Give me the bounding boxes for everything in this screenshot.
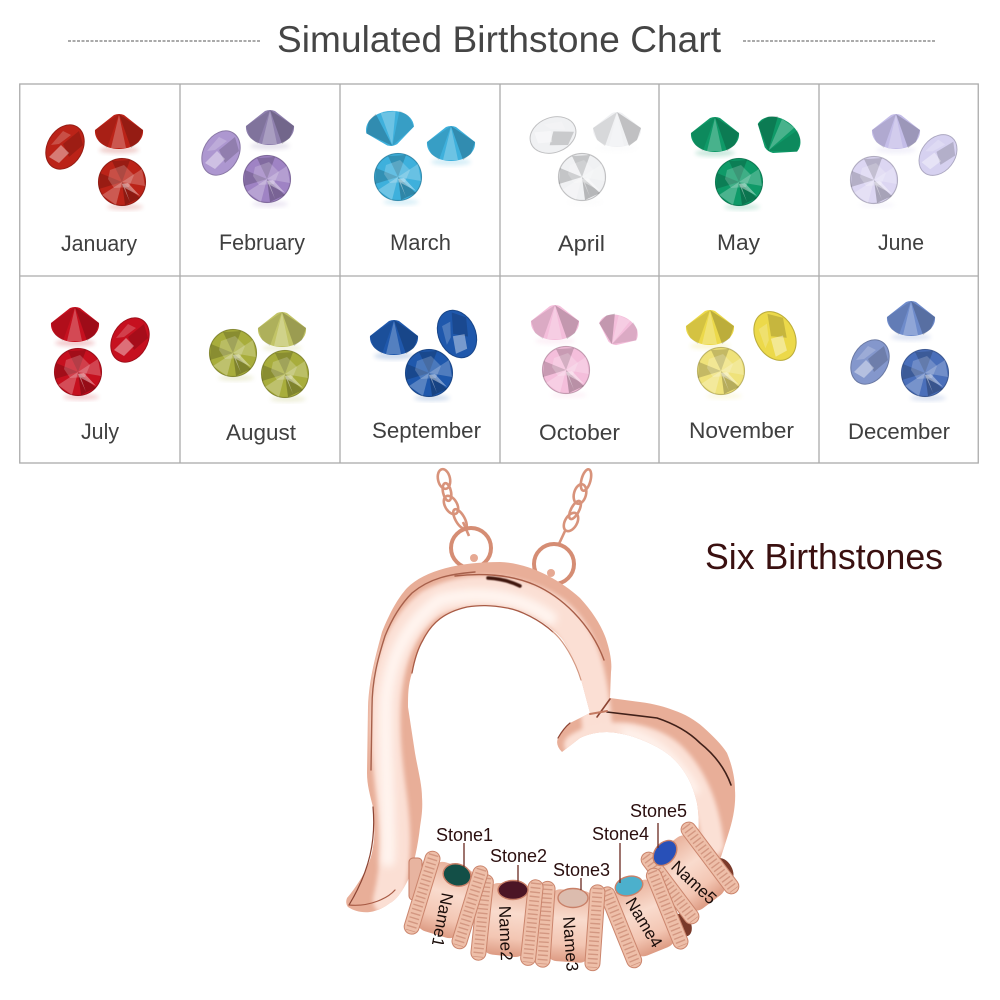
bead 2 — [470, 874, 544, 966]
heart pendant — [340, 555, 740, 920]
gems: February — [193, 110, 294, 207]
stone labels: Stone2 — [490, 846, 547, 866]
bead names: Name5 — [667, 857, 720, 908]
title: Simulated Birthstone Chart — [277, 19, 722, 60]
cell: November — [686, 293, 819, 443]
chain right — [558, 468, 593, 546]
label: April: April — [558, 231, 605, 256]
stone labels: Stone4 — [592, 824, 649, 844]
stone labels: Stone5 — [630, 801, 687, 821]
bead names — [428, 857, 720, 972]
caption: six birthstones: Six Birthstones — [705, 537, 943, 577]
bead names: Name3 — [559, 916, 582, 972]
stone labels: Stone3 — [553, 860, 610, 880]
heart edge lines — [349, 572, 731, 905]
birthstone chart grid — [20, 84, 978, 463]
cell: April — [513, 94, 641, 256]
bead names: Name2 — [495, 905, 516, 961]
cell: May — [691, 108, 808, 255]
heart body — [340, 555, 740, 920]
cell: June — [850, 114, 968, 255]
label: August: August — [226, 420, 297, 445]
gems: May — [691, 108, 808, 210]
cell: March — [364, 108, 475, 255]
heart highlights — [385, 591, 713, 900]
gems: March — [364, 108, 475, 205]
jump rings — [451, 528, 574, 584]
cell: October — [531, 305, 643, 445]
gems: April — [513, 94, 641, 205]
gems: November — [686, 293, 819, 399]
bead 4 — [598, 866, 690, 970]
label: December: December — [848, 419, 950, 444]
bead 5 — [638, 819, 742, 927]
stone labels: Stone1 — [436, 825, 493, 845]
cell: July — [51, 307, 158, 444]
gems: August — [209, 312, 309, 402]
cell: September — [370, 292, 499, 443]
bead 3 — [535, 881, 605, 971]
label: July: July — [81, 419, 120, 444]
gems: June — [850, 114, 968, 208]
label: March: March — [390, 230, 451, 255]
gems: January — [37, 114, 146, 210]
gems: October — [531, 305, 643, 398]
necklace — [340, 468, 742, 972]
chain left — [436, 468, 469, 536]
bead stones — [441, 836, 682, 908]
bead names: Name1 — [428, 891, 457, 949]
label: May: May — [717, 230, 761, 255]
label: November: November — [689, 418, 795, 443]
label: February: February — [219, 230, 306, 255]
label: June: June — [878, 230, 924, 255]
clasp connector — [409, 858, 422, 900]
cell: February — [193, 110, 306, 255]
label: October: October — [539, 420, 621, 445]
gems: September — [370, 292, 499, 401]
ring holes behind beads — [671, 855, 737, 939]
label: September: September — [372, 418, 482, 443]
stone labels — [436, 801, 687, 880]
cell: December — [842, 301, 950, 444]
cell: August — [209, 312, 309, 445]
bead names: Name4 — [622, 894, 666, 951]
gems: December — [842, 301, 949, 401]
cell: January — [37, 114, 146, 256]
label: January: January — [61, 231, 138, 256]
gems: July — [51, 307, 158, 400]
leader lines — [464, 823, 658, 890]
bead 1 — [402, 849, 490, 951]
